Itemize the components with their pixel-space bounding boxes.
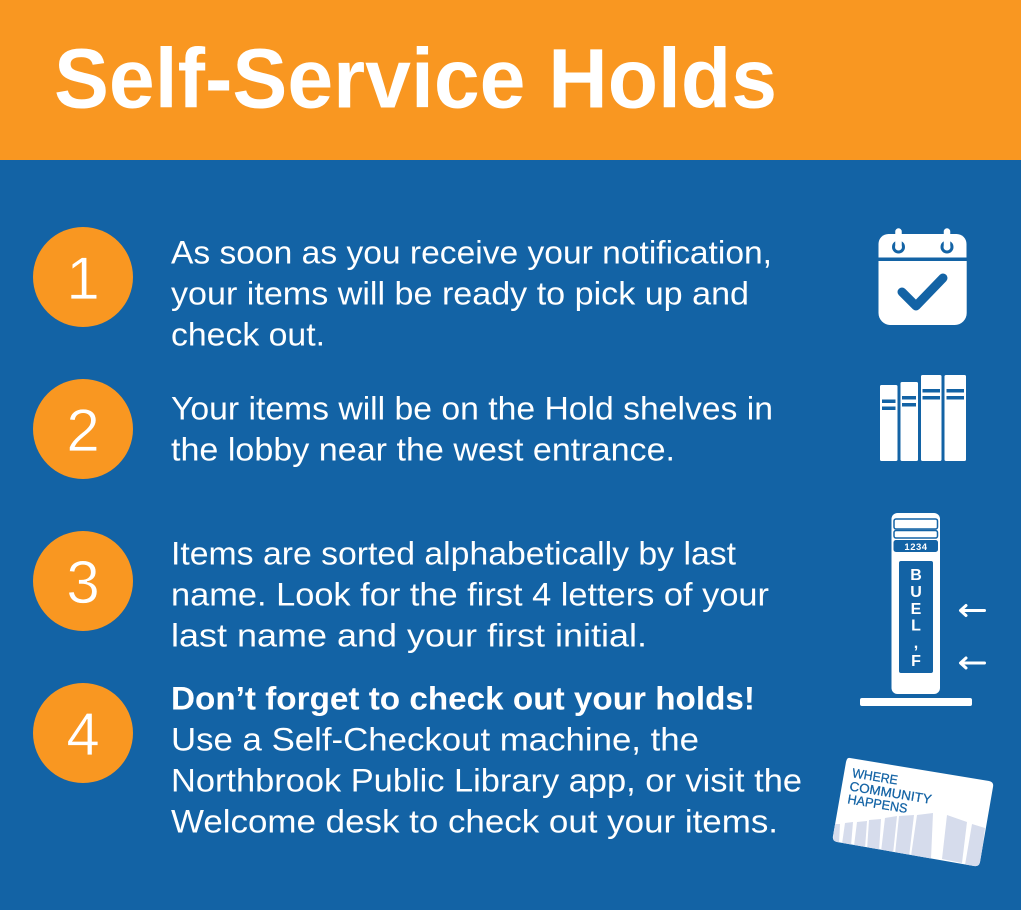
step 3 text: Items are sorted alphabetically by last [171,536,736,572]
icon: row of books [880,375,966,461]
step 4 text: Northbrook Public Library app, or visit the [171,762,802,798]
base line under marker [860,698,972,706]
step 4 text [171,680,802,840]
step 4 text: Don’t forget to check out your holds! [171,680,755,716]
icon: hold shelf marker with name label: B [910,567,922,584]
icon: hold shelf marker with name label: 1234 [904,542,928,553]
step 4 number badge: 4 [66,701,100,768]
step 2 text [171,390,773,468]
icon: calendar with check mark [878,232,967,325]
icon: library card: COMMUNITY [849,779,933,807]
icon: hold shelf marker with name label: L [911,618,921,634]
icon: library card: HAPPENS [847,791,909,816]
step 3 text: name. Look for the first 4 letters of your [171,576,769,612]
step 2 number badge [33,379,133,479]
icon: hold shelf marker with name label: U [910,584,922,601]
step 4 number badge [33,683,133,783]
icon: hold shelf marker with name label [860,513,972,706]
step 3 number badge [33,531,133,631]
step 1 text: As soon as you receive your notification, [171,234,772,270]
step 4 text: Welcome desk to check out your items. [171,804,778,840]
step 3 text [171,536,769,654]
icon: library card [833,758,993,867]
step 2 text: the lobby near the west entrance. [171,432,675,468]
step 1 text: your items will be ready to pick up and [171,276,749,312]
step 2 text: Your items will be on the Hold shelves in [171,390,773,426]
step 2 number badge: 2 [66,397,100,464]
step 3 text: last name and your first initial. [171,618,647,654]
step 1 text: check out. [171,316,325,352]
icon: hold shelf marker with name label: E [911,601,922,618]
step 3 number badge: 3 [66,549,100,616]
step 1 number badge [33,227,133,327]
step 1 text [171,234,772,352]
icon: library card: WHERE [851,765,899,788]
step 1 number badge: 1 [66,245,100,312]
icon: hold shelf marker with name label: F [911,653,921,670]
header banner [0,0,1021,160]
title: Self-Service Holds [54,32,777,126]
icon: arrows pointing to label [960,606,984,668]
icon: hold shelf marker with name label: , [914,635,918,652]
step 4 text: Use a Self-Checkout machine, the [171,722,699,758]
